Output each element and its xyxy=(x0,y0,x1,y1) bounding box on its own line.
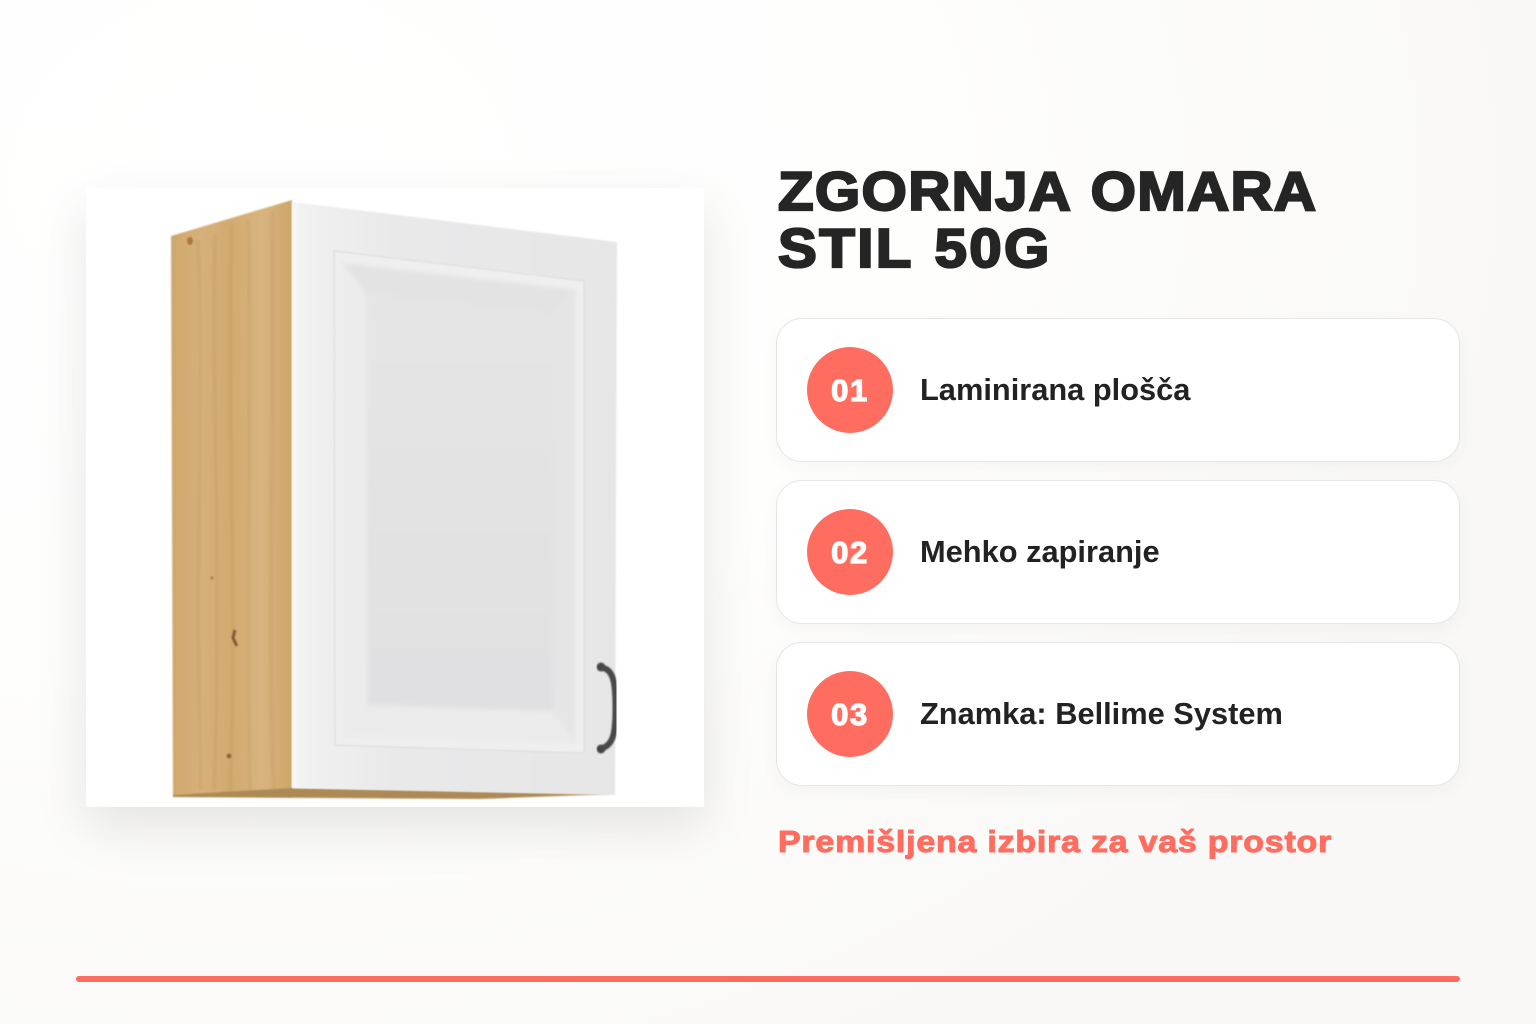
number badge 02 xyxy=(807,509,893,595)
cabinet door xyxy=(292,202,617,795)
number badge 01 xyxy=(807,347,893,433)
title: STIL 50G xyxy=(778,218,1052,279)
cabinet side: oak xyxy=(171,200,292,797)
feature card 2 xyxy=(776,480,1460,624)
number badge 03 xyxy=(807,671,893,757)
bottom accent bar xyxy=(76,976,1460,982)
product photo: wall cabinet xyxy=(86,188,704,807)
feature card 3 xyxy=(776,642,1460,786)
cabinet bottom edge xyxy=(173,788,614,799)
title: ZGORNJA OMARA xyxy=(778,161,1317,222)
number badge 03: 03 xyxy=(831,697,869,732)
number badge 01: 01 xyxy=(831,373,869,408)
feature text 1: Laminirana plošča xyxy=(920,372,1190,407)
title xyxy=(778,161,1317,279)
feature text 3: Znamka: Bellime System xyxy=(920,696,1283,731)
feature card 1 xyxy=(776,318,1460,462)
feature text 2: Mehko zapiranje xyxy=(920,534,1160,569)
number badge 02: 02 xyxy=(831,535,869,570)
tagline: Premišljena izbira za vaš prostor xyxy=(778,824,1332,859)
door handle xyxy=(598,664,616,752)
